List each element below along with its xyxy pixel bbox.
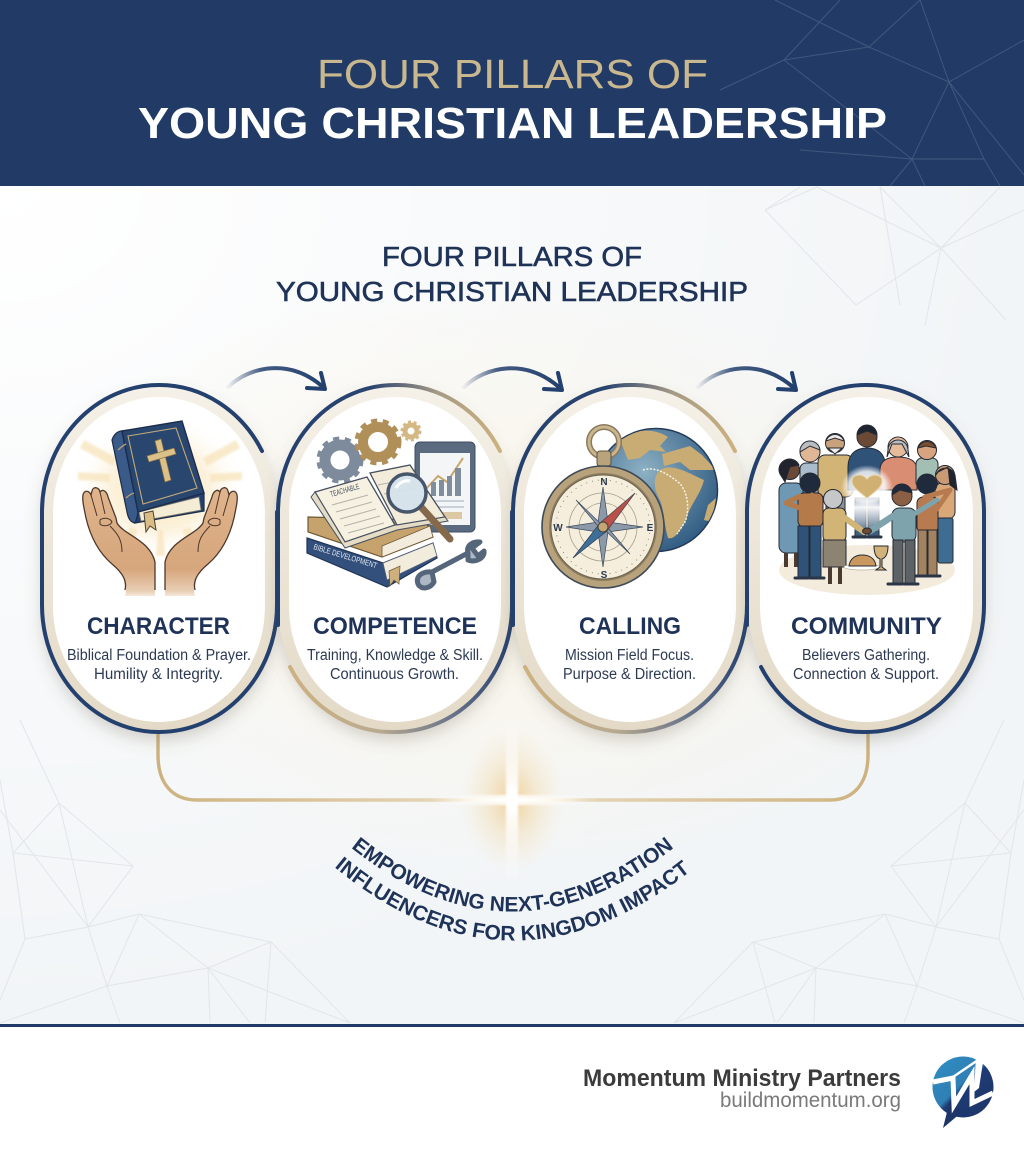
- panel: page background: [0, 186, 1024, 1026]
- description: calling: [563, 647, 696, 683]
- left hand: [83, 488, 155, 596]
- bible: [112, 421, 204, 532]
- icon: bible and praying hands: [72, 414, 248, 596]
- description: calling: Mission Field Focus.: [565, 647, 694, 664]
- description: competence: Continuous Growth.: [330, 666, 459, 683]
- panel: character: [42, 385, 277, 732]
- description: competence: Training, Knowledge & Skill.: [307, 647, 483, 664]
- heading: calling: CALLING: [579, 613, 681, 640]
- arrow: competence to calling: [464, 368, 562, 390]
- icon: books, gears, tablet and tools: [307, 421, 484, 588]
- description: competence: [307, 647, 483, 683]
- section heading: [276, 241, 748, 307]
- compass letters: N: [600, 477, 608, 488]
- heart with glow: [841, 465, 893, 531]
- heading: competence: COMPETENCE: [313, 613, 477, 640]
- compass letters: S: [601, 570, 608, 581]
- curved tagline: EMPOWERING NEXT-GENERATION: [352, 836, 673, 912]
- heading: community: COMMUNITY: [791, 613, 942, 640]
- description: character: Biblical Foundation & Prayer.: [67, 647, 251, 664]
- description: character: [67, 647, 251, 683]
- panel: competence: [278, 385, 512, 732]
- section heading: FOUR PILLARS OF: [382, 241, 642, 272]
- compass letters: E: [647, 523, 654, 534]
- small label on the lower book: BIBLE DEVELOPMENT: [312, 542, 378, 570]
- footer: [0, 1024, 1024, 1154]
- compass letters: W: [553, 523, 563, 534]
- icon: momentum logo: [932, 1056, 994, 1128]
- description: community: [793, 647, 939, 683]
- small label on the open book: TEACHABLE: [329, 482, 360, 499]
- arrow: calling to community: [698, 368, 796, 390]
- background low-poly network: [0, 187, 1024, 1023]
- header title: [138, 51, 887, 148]
- right hand: [165, 488, 237, 596]
- header band: [0, 0, 1024, 186]
- panel: community: [747, 385, 984, 732]
- description: character: Humility & Integrity.: [94, 666, 223, 683]
- footer organisation name and url: Momentum Ministry Partners: [583, 1065, 901, 1092]
- arrow: character to competence: [228, 368, 325, 389]
- description: community: Believers Gathering.: [802, 647, 930, 664]
- header title: FOUR PILLARS OF: [317, 51, 708, 97]
- connector and star of light: [158, 715, 868, 885]
- curved tagline: INFLUENCERS FOR KINGDOM IMPACT: [335, 856, 687, 941]
- header title: YOUNG CHRISTIAN LEADERSHIP: [138, 99, 887, 148]
- heading: character: CHARACTER: [87, 613, 230, 640]
- icon: compass and globe: [542, 427, 718, 588]
- icon: believers gathered around a heart: [779, 425, 957, 595]
- footer organisation name and url: buildmomentum.org: [720, 1089, 901, 1112]
- description: calling: Purpose & Direction.: [563, 666, 696, 683]
- footer organisation name and url: [583, 1065, 901, 1112]
- section heading: YOUNG CHRISTIAN LEADERSHIP: [276, 276, 748, 307]
- panel: calling: [513, 385, 747, 732]
- compass letters: [553, 477, 654, 581]
- description: community: Connection & Support.: [793, 666, 939, 683]
